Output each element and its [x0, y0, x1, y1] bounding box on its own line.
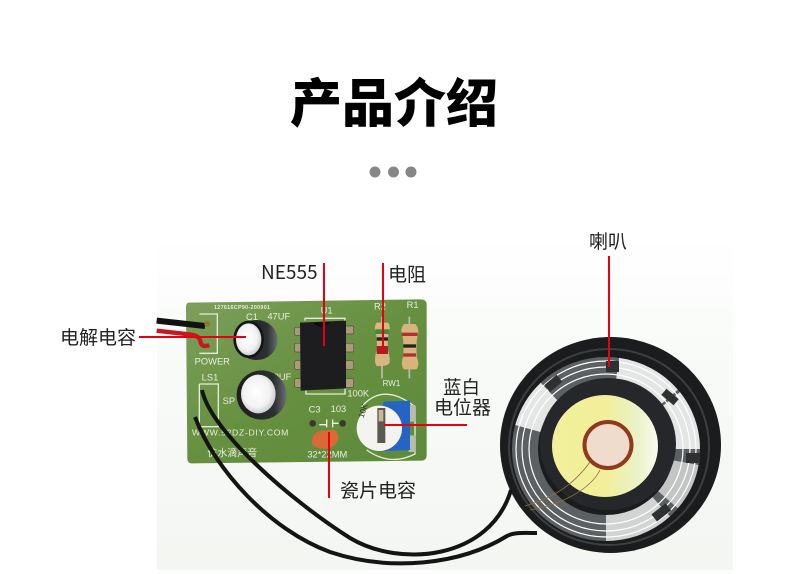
label: blue-white potentiometer: 电位器 — [434, 393, 491, 420]
label: speaker: 喇叭 — [589, 227, 627, 254]
clear surround base — [525, 370, 687, 528]
silkscreen text: 仿水滴声音 — [207, 445, 257, 460]
photo background — [157, 235, 733, 570]
silkscreen text: 100K — [347, 389, 370, 399]
copper voice coil — [584, 422, 632, 468]
silkscreen text: WWW.52DZ-DIY.COM — [192, 427, 289, 437]
electrolytic capacitor C2 — [237, 370, 287, 420]
label: blue-white potentiometer — [384, 374, 491, 426]
silkscreen text: SP — [223, 396, 235, 406]
silkscreen text: U1 — [321, 305, 333, 315]
silkscreen text: LS1 — [202, 373, 218, 383]
label: NE555 — [261, 258, 325, 346]
board — [186, 299, 427, 463]
title: 产品介绍 — [290, 62, 498, 137]
silkscreen text: 47UF — [267, 311, 290, 321]
NE555 chip — [295, 321, 354, 391]
outer rim — [500, 337, 721, 553]
speaker — [500, 337, 721, 553]
blue potentiometer: 10K — [357, 402, 370, 419]
silkscreen text: C1 — [246, 312, 258, 322]
yellow cone — [552, 395, 658, 497]
label: electrolytic capacitor: 电解电容 — [60, 323, 136, 350]
speaker wires — [195, 390, 537, 563]
photo: circuit board — [157, 299, 427, 463]
inner black ring — [540, 378, 676, 510]
label: ceramic capacitor: 瓷片电容 — [340, 476, 416, 503]
label: NE555: NE555 — [261, 258, 318, 285]
silkscreen text: POWER — [195, 357, 230, 367]
label: resistor: 电阻 — [388, 260, 426, 287]
surround ridges — [516, 361, 696, 537]
silkscreen text: 470UF — [263, 372, 292, 382]
dark tick marks — [544, 361, 700, 521]
ceramic capacitor C3 — [309, 419, 346, 449]
silkscreen text: C3 — [309, 405, 321, 415]
electrolytic capacitor C1 — [233, 320, 278, 360]
resistor R1 — [401, 317, 418, 378]
label: ceramic capacitor — [328, 432, 416, 503]
silkscreen outlines — [199, 314, 415, 459]
label: resistor — [382, 260, 426, 353]
silkscreen text: 32*22MM — [307, 449, 347, 459]
decorative dots — [370, 166, 416, 178]
power wires — [157, 321, 205, 326]
label: speaker — [589, 227, 627, 367]
white surround sectors — [528, 371, 687, 528]
label: blue-white potentiometer: 蓝白 — [443, 374, 480, 400]
silkscreen text: 103 — [331, 404, 346, 414]
silkscreen text: R2 — [374, 301, 386, 311]
resistor R2 — [375, 317, 390, 378]
blue potentiometer — [357, 401, 415, 452]
coil lead wires — [525, 462, 600, 510]
silkscreen text: RW1 — [383, 379, 401, 388]
silkscreen text: R1 — [407, 300, 419, 310]
silkscreen text — [192, 300, 419, 460]
silkscreen text: 127616CP90-200901 — [214, 305, 270, 311]
